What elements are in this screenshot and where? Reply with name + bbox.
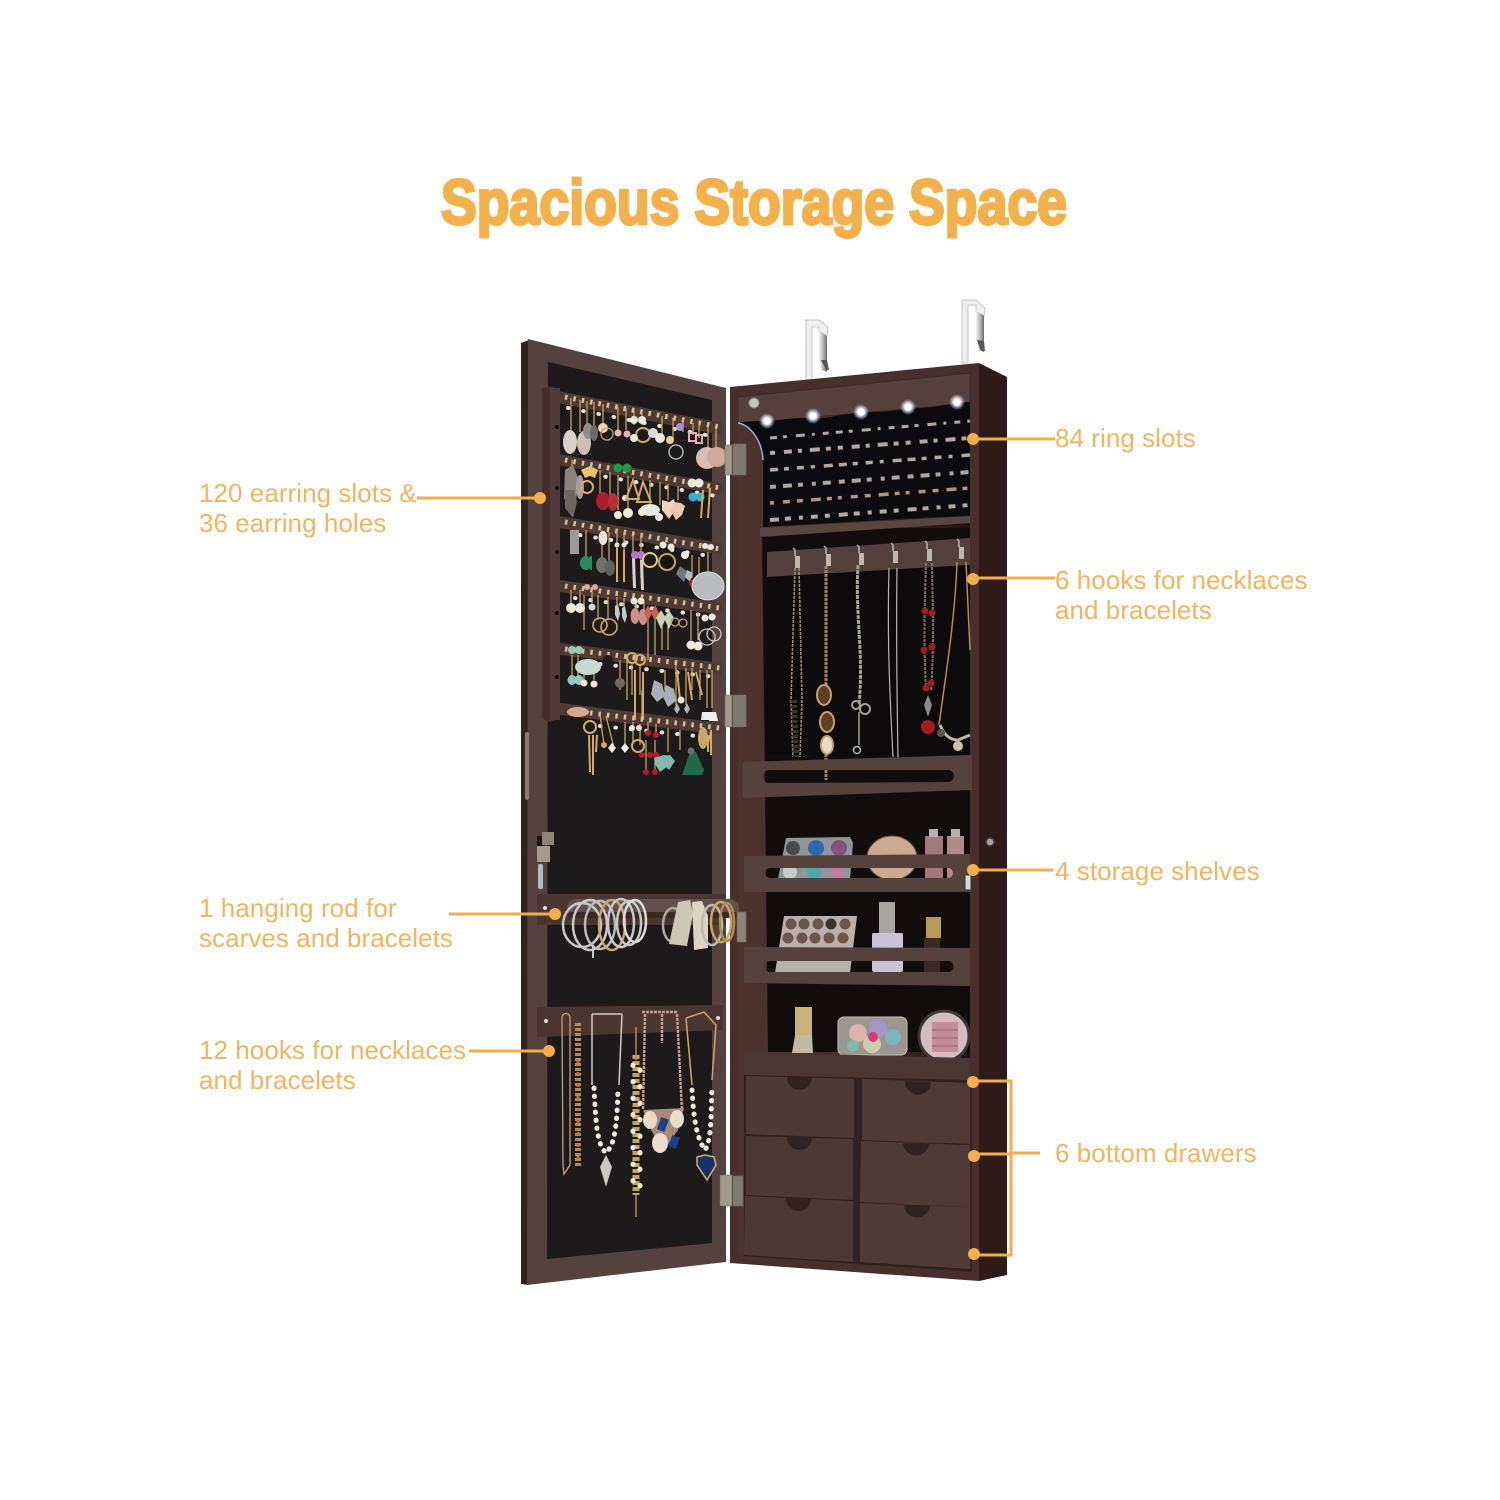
drawer bottom right bbox=[860, 1203, 970, 1269]
drawer unit top rail bbox=[744, 1052, 970, 1082]
callout: 4 storage shelves: 4 storage shelves bbox=[1055, 856, 1260, 886]
cosmetics on second shelf bbox=[778, 829, 964, 880]
earrings row 5 bbox=[565, 646, 720, 722]
callout: 6 bottom drawers bbox=[967, 1076, 1257, 1260]
callout: 120 earring slots bbox=[199, 478, 546, 538]
six drawers bbox=[744, 1075, 972, 1272]
callout: 120 earring slots: 36 earring holes bbox=[199, 508, 386, 538]
door hinges bbox=[720, 444, 746, 1206]
callout: 4 storage shelves bbox=[967, 856, 1260, 886]
latch hardware bbox=[537, 832, 554, 889]
callout: 12 hooks: and bracelets bbox=[199, 1065, 356, 1095]
ring slot tray bbox=[738, 402, 970, 527]
callout: 12 hooks bbox=[199, 1035, 555, 1095]
callout: hanging rod: scarves and bracelets bbox=[199, 923, 453, 953]
LED lights bbox=[759, 394, 965, 429]
bracelets on rod bbox=[563, 899, 734, 958]
shelf rail with slot 1 bbox=[743, 755, 972, 798]
callout: hanging rod bbox=[199, 893, 561, 953]
USB port bbox=[965, 875, 971, 890]
earring rack bbox=[542, 386, 722, 735]
callout: 120 earring slots: 120 earring slots & bbox=[199, 478, 417, 508]
drawer top left bbox=[746, 1076, 854, 1138]
open cabinet bbox=[730, 363, 1007, 1281]
top header panel bbox=[738, 373, 970, 424]
drawer middle left bbox=[746, 1136, 853, 1200]
ring tray ledge bbox=[760, 516, 970, 537]
title: Spacious Storage Space bbox=[441, 168, 1067, 238]
drawer top right bbox=[862, 1079, 970, 1144]
door frame bbox=[521, 339, 726, 1285]
interior back wall bbox=[738, 400, 970, 1270]
earrings row 4 bbox=[565, 584, 721, 660]
callout: 6 hooks: 6 hooks for necklaces bbox=[1055, 565, 1308, 595]
necklace hook bar bbox=[767, 538, 970, 755]
earrings row 6 bbox=[567, 707, 720, 775]
necklace hook bar bbox=[537, 1005, 723, 1037]
earrings row 3 bbox=[565, 522, 724, 600]
earrings row 1 bbox=[563, 397, 727, 469]
icon: over-door hooks bbox=[806, 300, 985, 380]
drawer bottom left bbox=[744, 1196, 853, 1262]
shelf rail with slot 2 bbox=[744, 854, 970, 892]
cabinet necklaces bbox=[791, 562, 970, 780]
callout: 6 hooks bbox=[967, 565, 1308, 625]
hanging rod bbox=[537, 894, 739, 925]
callout: 6 bottom drawers: 6 bottom drawers bbox=[1055, 1138, 1257, 1168]
callout: 84 ring slots: 84 ring slots bbox=[1055, 423, 1196, 453]
cosmetics on bottom shelf bbox=[792, 1007, 969, 1061]
callout: 6 hooks: and bracelets bbox=[1055, 595, 1212, 625]
cabinet shell bbox=[730, 363, 1007, 1281]
drawer middle right bbox=[860, 1141, 970, 1207]
callout: hanging rod: 1 hanging rod for bbox=[199, 893, 397, 923]
callout: 12 hooks: 12 hooks for necklaces bbox=[199, 1035, 466, 1065]
door necklaces bbox=[562, 1012, 716, 1217]
shelf rail with slot 3 bbox=[744, 947, 970, 986]
open door with earring rack, rod and hooks bbox=[521, 339, 739, 1285]
callout: 84 ring slots bbox=[967, 423, 1196, 453]
earrings row 2 bbox=[564, 460, 720, 521]
cosmetics on third shelf bbox=[775, 902, 941, 973]
